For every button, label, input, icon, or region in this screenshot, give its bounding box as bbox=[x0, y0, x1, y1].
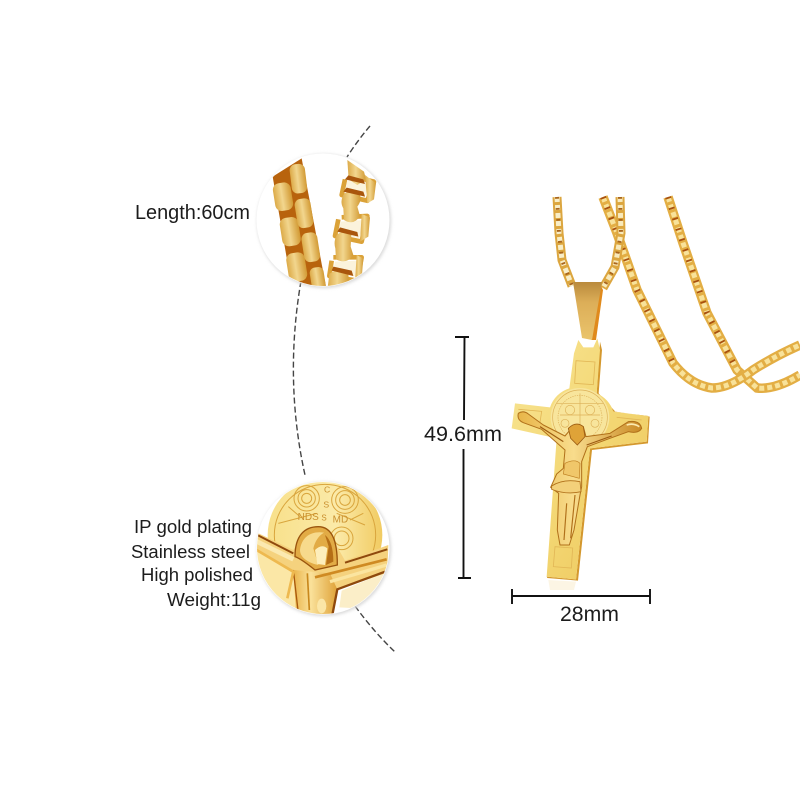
chain strand: pendant left bbox=[557, 197, 572, 286]
medallion: C bbox=[324, 485, 330, 495]
chain strand: long loop bbox=[603, 197, 800, 388]
figure arms and torso bbox=[257, 534, 388, 614]
dashed connector arc: top bbox=[347, 126, 370, 157]
cross reflection bbox=[548, 580, 576, 590]
medallion: NDS bbox=[298, 512, 319, 523]
pendant bail bbox=[573, 282, 603, 340]
figure head bbox=[295, 527, 337, 570]
detail circle: chain links bbox=[256, 154, 391, 291]
medallion bbox=[551, 388, 609, 447]
height dimension: 49.6mm bbox=[424, 421, 502, 446]
figure of Christ bbox=[518, 412, 642, 545]
cross pendant bbox=[512, 338, 650, 590]
spec labels: High polished bbox=[141, 564, 253, 585]
left chain strand bbox=[272, 158, 326, 291]
spec labels: Stainless steel bbox=[131, 541, 250, 562]
width dimension bbox=[512, 589, 650, 626]
medallion: S bbox=[323, 499, 329, 509]
chain strand: pendant right bbox=[603, 197, 621, 288]
chain strand: far right bbox=[668, 197, 800, 388]
spec labels: Weight:11g bbox=[167, 589, 261, 610]
label: length: Length:60cm bbox=[135, 202, 250, 224]
medallion: S bbox=[321, 514, 327, 523]
recessed panels bbox=[518, 361, 642, 568]
dashed connector arc: bottom bbox=[355, 606, 395, 652]
height dimension bbox=[424, 337, 502, 578]
detail circle: medallion and figure bbox=[250, 478, 391, 620]
right chain strand bbox=[327, 160, 376, 290]
necklace chains bbox=[557, 197, 800, 388]
medallion bbox=[268, 482, 382, 560]
cross plate bbox=[512, 338, 648, 579]
dashed connector arc: middle bbox=[293, 281, 305, 475]
spec labels bbox=[131, 516, 261, 610]
width dimension: 28mm bbox=[560, 603, 619, 626]
spec labels: IP gold plating bbox=[134, 516, 252, 537]
cross side edge bbox=[547, 342, 650, 581]
medallion: MD bbox=[333, 515, 348, 526]
cross plate below arms bbox=[257, 552, 296, 608]
